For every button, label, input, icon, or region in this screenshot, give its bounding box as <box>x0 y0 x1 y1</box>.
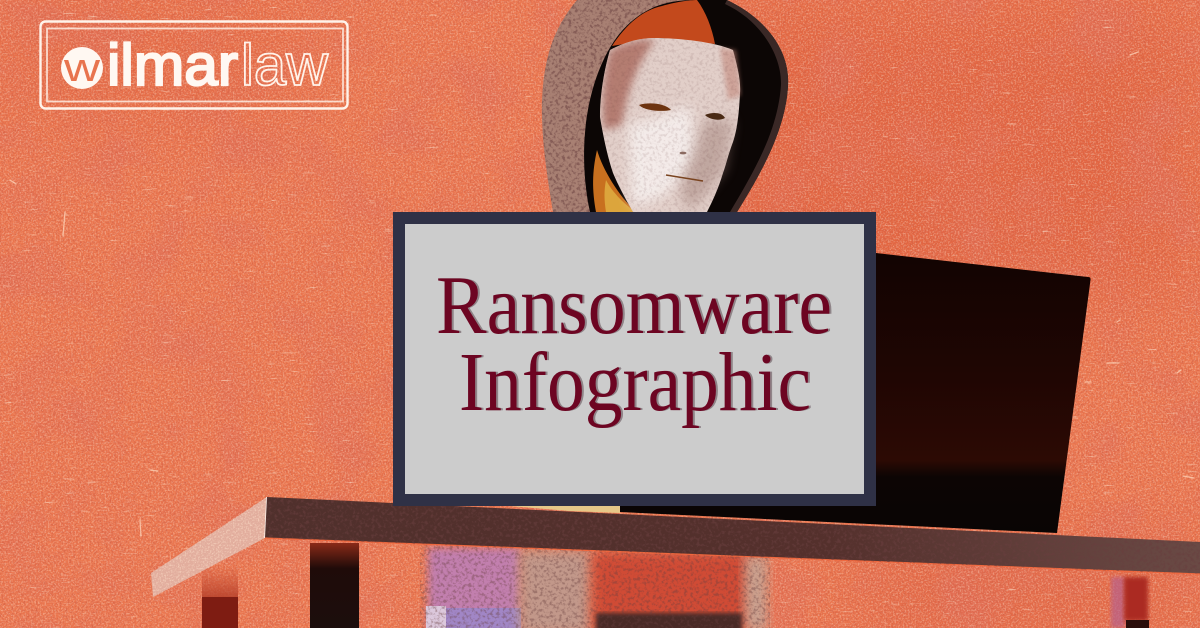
neck remnant under panel <box>497 505 620 513</box>
pale block <box>426 606 446 628</box>
logo badge letter: w <box>63 46 100 90</box>
logo: wilmarlaw <box>40 22 348 108</box>
mask side shade <box>680 120 733 212</box>
mask blush shading <box>602 39 655 130</box>
dark block at bottom <box>596 613 742 628</box>
yellow glow at neck <box>593 150 636 212</box>
mask eye right <box>705 113 725 120</box>
desk leg right <box>1111 577 1149 628</box>
wall scratches and flecks <box>10 52 1194 536</box>
mask nose <box>680 152 686 154</box>
person: white mask <box>598 36 743 212</box>
person body below desk <box>420 545 770 628</box>
torso texture <box>420 545 770 628</box>
person: hood <box>540 0 790 212</box>
desk leg far-left <box>202 565 238 628</box>
title shadow <box>438 259 834 429</box>
desk leg centre-left <box>310 543 359 628</box>
mask mouth <box>666 175 703 181</box>
torso edge <box>745 556 767 628</box>
laptop screen <box>620 253 1091 533</box>
logo wordmark outline: law <box>241 33 329 98</box>
mask eye left <box>639 103 671 111</box>
desk front face <box>265 497 1200 574</box>
title shadow: Ransomware <box>438 259 834 352</box>
mask edge blush <box>720 48 741 100</box>
orange inside of hood <box>612 0 715 46</box>
title text <box>436 259 832 429</box>
logo frame <box>40 22 348 108</box>
title text: Ransomware <box>436 259 832 352</box>
hood dim rim <box>725 0 788 212</box>
desk side face <box>151 497 267 597</box>
panel: title card <box>393 212 876 506</box>
mask texture <box>598 36 743 212</box>
hood inner shadow <box>584 0 788 212</box>
red torso <box>592 552 748 628</box>
title text: Infographic <box>459 336 811 429</box>
logo badge <box>61 47 103 89</box>
beige torso <box>519 550 591 628</box>
title shadow: Infographic <box>461 336 813 429</box>
logo wordmark solid: ilmar <box>107 33 238 98</box>
desk top <box>150 496 1200 598</box>
title <box>436 259 834 429</box>
purple lower block <box>426 608 521 628</box>
mask highlights <box>628 105 695 205</box>
